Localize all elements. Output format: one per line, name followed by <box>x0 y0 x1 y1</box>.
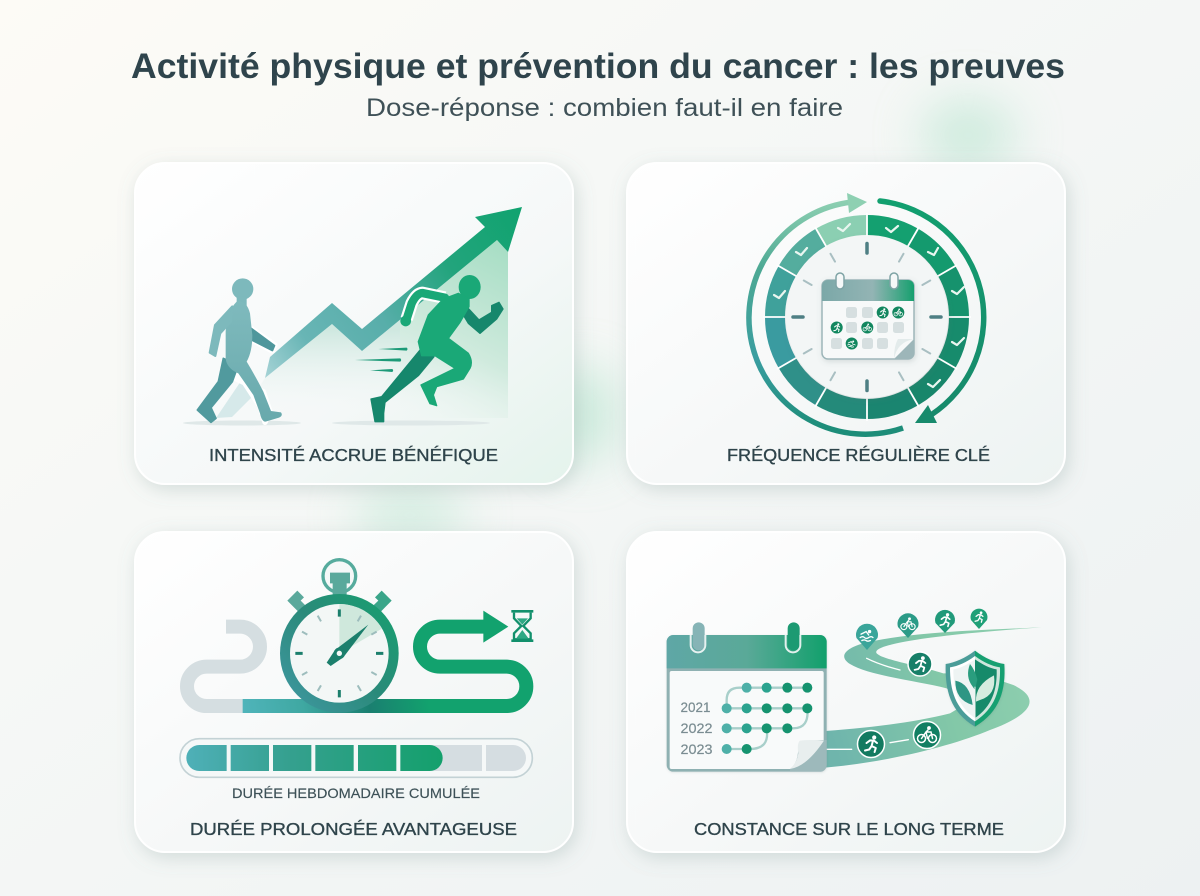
icon: walking person <box>197 278 282 422</box>
inner disc <box>786 236 948 398</box>
icon: year calendar <box>667 622 827 772</box>
panel: constance <box>627 532 1065 852</box>
icon: calendar <box>822 273 914 359</box>
speed lines <box>355 348 407 372</box>
clock ticks <box>793 244 941 390</box>
icon: right circular arrow <box>880 201 984 423</box>
icon: activity badges on road <box>858 652 940 758</box>
label: FRÉQUENCE RÉGULIÈRE CLÉ <box>727 445 990 465</box>
icon: hourglass <box>511 611 533 641</box>
background glow: middle <box>546 365 618 465</box>
panel: intensité <box>135 163 573 484</box>
icon: winding road <box>817 627 1042 768</box>
icon: green path with arrow <box>243 611 526 706</box>
ground shadows <box>183 420 490 426</box>
background glow: top right <box>920 99 1016 171</box>
green area under arrow <box>240 240 508 418</box>
icon: check marks <box>774 224 964 387</box>
chart: year dot tracks <box>722 683 812 754</box>
icon: grey path <box>187 627 260 706</box>
icon: left circular arrow <box>749 193 903 434</box>
label: INTENSITÉ ACCRUE BÉNÉFIQUE <box>209 445 498 465</box>
card background <box>135 532 573 852</box>
year labels: 2021 <box>680 700 710 715</box>
title: Activité physique et prévention du cancer : les preuves <box>131 47 1065 86</box>
icon: stopwatch <box>280 560 399 713</box>
icon: running person <box>371 275 503 422</box>
label: DURÉE PROLONGÉE AVANTAGEUSE <box>190 819 517 839</box>
chart: rising arrow <box>216 207 522 418</box>
subtitle: Dose-réponse : combien faut-il en faire <box>366 94 843 122</box>
year labels: 2022 <box>680 721 712 736</box>
year labels <box>680 700 712 757</box>
card background <box>627 532 1065 852</box>
chart: twelve segment ring <box>763 213 971 421</box>
bar caption: DURÉE HEBDOMADAIRE CUMULÉE <box>232 785 480 801</box>
year labels: 2023 <box>680 742 712 757</box>
icon: shield with leaves <box>946 651 1005 727</box>
card background <box>627 163 1065 484</box>
card background <box>135 163 573 484</box>
icon: activity map pins <box>856 609 988 650</box>
background glow: lower left <box>352 491 468 539</box>
panel: durée <box>135 532 573 852</box>
chart: progress bar <box>180 739 532 777</box>
panel: fréquence <box>627 163 1065 484</box>
label: CONSTANCE SUR LE LONG TERME <box>694 819 1004 839</box>
